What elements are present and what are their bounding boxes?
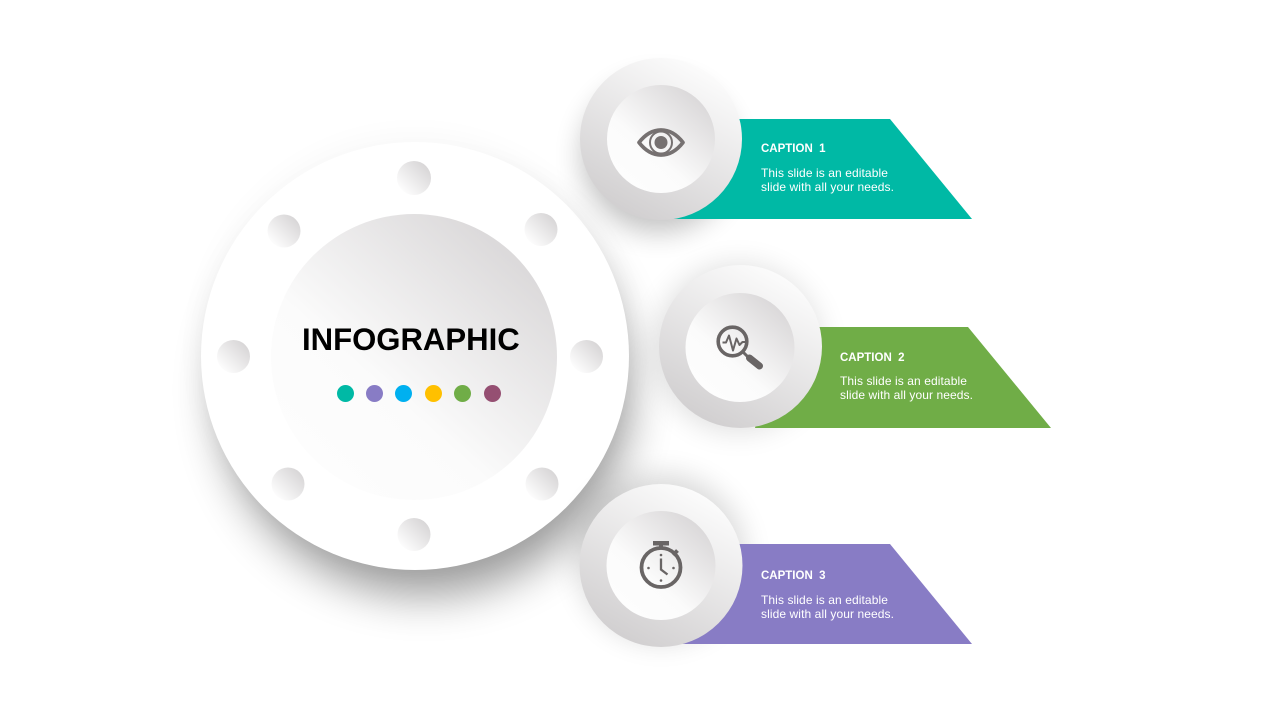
caption body: This slide is an editable	[761, 593, 888, 607]
banner: teal	[672, 119, 972, 219]
banner: purple	[680, 544, 972, 644]
outer circle	[580, 484, 742, 647]
caption body: slide with all your needs.	[761, 607, 894, 621]
inner circle	[606, 511, 716, 620]
caption body: This slide is an editable	[840, 374, 967, 388]
panel: central disc	[201, 142, 629, 570]
main white circle	[201, 142, 629, 570]
panel: caption 1	[580, 58, 972, 220]
caption body: slide with all your needs.	[761, 180, 894, 194]
title: INFOGRAPHIC	[302, 322, 520, 357]
outer circle	[659, 265, 822, 428]
caption heading: CAPTION 1	[761, 143, 826, 155]
caption heading: CAPTION 2	[840, 352, 905, 364]
panel: caption 2	[659, 265, 1051, 428]
caption body: This slide is an editable	[761, 166, 888, 180]
panel: caption 3	[580, 484, 972, 647]
outer circle	[580, 58, 742, 220]
caption heading: CAPTION 3	[761, 570, 826, 582]
icon: stopwatch	[642, 541, 680, 587]
inner gradient circle	[271, 214, 557, 500]
inner circle	[686, 293, 794, 402]
banner: green	[755, 327, 1051, 428]
ring of small circles	[217, 161, 603, 551]
colour dots	[337, 385, 501, 402]
icon: eye	[639, 130, 683, 155]
inner circle	[607, 85, 715, 193]
caption body: slide with all your needs.	[840, 388, 973, 402]
icon: magnifier with pulse	[718, 327, 760, 366]
